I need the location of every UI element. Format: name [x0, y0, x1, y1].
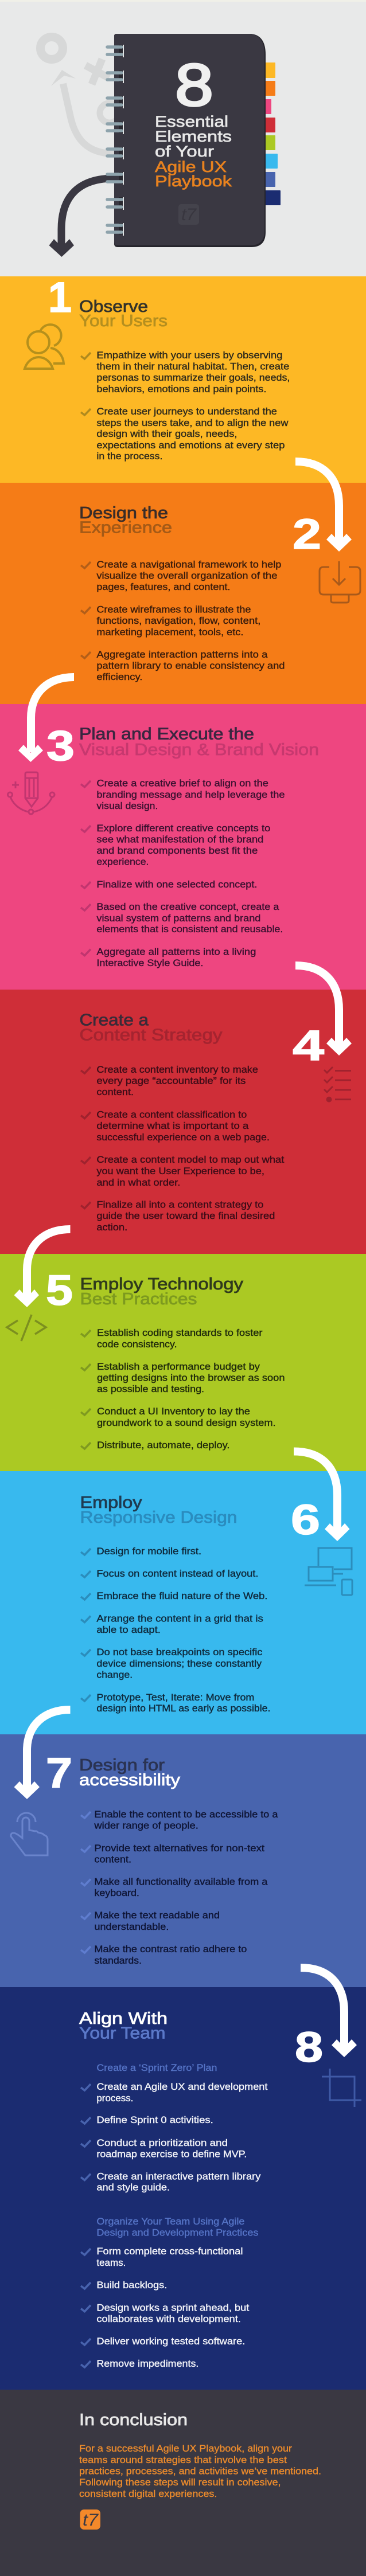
checklist: sprint zero: Conduct a prioritization and: [96, 2138, 228, 2148]
icon: code brackets: [7, 1315, 46, 1341]
icon: checklist: [324, 1067, 351, 1101]
heading: [79, 504, 172, 537]
heading: Observe: [79, 298, 148, 316]
number 5: 5: [46, 1266, 73, 1314]
icon: t7 logo: [80, 2509, 100, 2530]
checklist: Based on the creative concept, create a: [96, 902, 279, 912]
checklist: Establish coding standards to foster: [97, 1328, 263, 1338]
checklist: sprint zero: process.: [96, 2093, 133, 2104]
checklist: Aggregate interaction patterns into a: [96, 650, 268, 660]
checklist: Create a content model to map out what: [96, 1155, 285, 1165]
title: [155, 52, 232, 190]
checklist: Do not base breakpoints on specific: [96, 1647, 262, 1658]
checklist: functions, navigation, flow, content,: [96, 616, 260, 626]
checklist: Aggregate all patterns into a living: [96, 947, 256, 957]
checklist: pages, features, and content.: [96, 582, 230, 592]
panel: step 7 accessibility: [0, 1734, 366, 1987]
checklist: [81, 1546, 270, 1714]
subheading: sprint zero: Create a ‘Sprint Zero’ Plan: [96, 2063, 217, 2073]
checklist: organize team: Design works a sprint ahead, but: [96, 2303, 250, 2313]
checklist: Create a content inventory to make: [96, 1065, 258, 1075]
heading: Responsive Design: [80, 1508, 237, 1527]
icon: pencil with curve: [8, 772, 54, 814]
number 6: 6: [291, 1496, 320, 1543]
title: of Your: [155, 143, 214, 160]
subheading: organize team: Design and Development Practices: [96, 2228, 258, 2238]
title: Playbook: [155, 173, 232, 190]
checklist: experience.: [96, 857, 149, 867]
checklist: organize team: collaborates with development.: [96, 2314, 241, 2324]
checklist: elements that is consistent and reusable.: [96, 924, 283, 935]
heading: Your Users: [79, 312, 168, 330]
title: Essential: [155, 113, 228, 130]
checklist: [81, 1809, 278, 1966]
arrow: step 7 to 8: [301, 1968, 357, 2057]
checklist: [81, 1328, 285, 1451]
checklist: sprint zero: Create an interactive pattern library: [96, 2172, 261, 2182]
heading: Plan and Execute the: [79, 725, 254, 744]
panel: conclusion: [0, 2390, 366, 2576]
heading: [79, 2010, 168, 2043]
arrow: step 4 to 5: [14, 1229, 70, 1307]
number 2: 2: [293, 510, 321, 558]
arrow: step 1 to 2: [295, 462, 352, 552]
checklist: Create user journeys to understand the: [96, 406, 277, 417]
panel: step 2 design the experience: [0, 483, 366, 704]
checklist: behaviors, emotions and pain points.: [96, 384, 266, 394]
checklist: Enable the content to be accessible to a: [94, 1809, 278, 1820]
checklist: steps the users take, and to align the new: [96, 418, 288, 428]
checklist: understandable.: [94, 1922, 169, 1932]
checklist: content.: [94, 1855, 131, 1865]
title: 8: [175, 52, 213, 119]
checklist: sprint zero: and style guide.: [96, 2183, 170, 2193]
heading: [79, 1756, 181, 1789]
checklist: Explore different creative concepts to: [96, 823, 270, 834]
checklist: sprint zero: roadmap exercise to define MVP.: [96, 2149, 247, 2160]
heading: accessibility: [79, 1771, 181, 1789]
number 1: 1: [48, 273, 72, 321]
panel: step 5 technology: [0, 1254, 366, 1471]
checklist: Prototype, Test, Iterate: Move from: [96, 1692, 254, 1703]
notebook cover: [114, 34, 266, 247]
checklist: design with their goals, needs,: [96, 429, 237, 439]
checklist: wider range of people.: [94, 1821, 198, 1831]
heading: Content Strategy: [79, 1026, 223, 1045]
checklist: pattern library to enable consistency and: [96, 661, 285, 671]
subheading: organize team: Organize Your Team Using Agile: [96, 2217, 244, 2227]
checklist: successful experience on a web page.: [96, 1132, 270, 1143]
checklist: in the process.: [96, 451, 162, 462]
arrow: step 5 to 6: [294, 1452, 350, 1541]
number 4: 4: [293, 1022, 324, 1069]
icon: t7 logo: t7: [83, 2511, 99, 2530]
heading: [79, 725, 319, 759]
checklist: action.: [96, 1222, 127, 1233]
checklist: and brand components best fit the: [96, 846, 258, 856]
arrow: step 2 to 3: [18, 677, 74, 762]
icon: monitor download: [320, 561, 360, 603]
checklist: as possible and testing.: [97, 1384, 204, 1394]
checklist: visual design.: [96, 801, 158, 811]
checklist: content.: [96, 1087, 134, 1097]
checklist: [81, 560, 285, 682]
heading: [79, 298, 168, 330]
checklist: organize team: Remove impediments.: [96, 2359, 198, 2369]
checklist: visual system of patterns and brand: [96, 913, 260, 924]
icon: touch hand: [11, 1813, 48, 1855]
checklist: organize team: [81, 2246, 250, 2369]
checklist: Create a creative brief to align on the: [96, 779, 268, 789]
heading: [79, 1011, 223, 1045]
checklist: Focus on content instead of layout.: [96, 1569, 258, 1579]
conclusion text: teams around strategies that involve the best: [79, 2455, 287, 2465]
checklist: you want the User Experience to be,: [96, 1166, 264, 1176]
checklist: groundwork to a sound design system.: [97, 1418, 276, 1428]
checklist: organize team: Form complete cross-functional: [96, 2246, 243, 2257]
checklist: Embrace the fluid nature of the Web.: [96, 1591, 267, 1601]
checklist: Finalize with one selected concept.: [96, 879, 257, 890]
conclusion text: [79, 2444, 321, 2499]
heading: [80, 1494, 237, 1527]
heading: [80, 1275, 244, 1308]
icon: logo on cover: [178, 204, 199, 225]
checklist: device dimensions; these constantly: [96, 1659, 262, 1669]
checklist: see what manifestation of the brand: [96, 835, 263, 845]
checklist: organize team: Build backlogs.: [96, 2280, 167, 2290]
checklist: able to adapt.: [96, 1625, 161, 1635]
checklist: [81, 350, 290, 462]
checklist: Arrange the content in a grid that is: [96, 1613, 263, 1624]
checklist: [81, 1065, 285, 1233]
checklist: getting designs into the browser as soon: [97, 1373, 285, 1383]
checklist: Distribute, automate, deploy.: [97, 1440, 229, 1451]
heading: Visual Design & Brand Vision: [79, 741, 319, 759]
heading: In conclusion: [79, 2411, 188, 2429]
checklist: marketing placement, tools, etc.: [96, 627, 243, 638]
checklist: design into HTML as early as possible.: [96, 1703, 270, 1714]
checklist: Establish a performance budget by: [97, 1362, 260, 1372]
heading: Create a: [79, 1011, 149, 1030]
checklist: sprint zero: [81, 2082, 268, 2193]
heading: Your Team: [79, 2024, 165, 2043]
title: Agile UX: [155, 158, 227, 175]
heading: Align With: [79, 2010, 168, 2028]
panel: step 3 visual design: [0, 704, 366, 990]
number 8: 8: [295, 2023, 323, 2071]
checklist: Empathize with your users by observing: [96, 350, 282, 361]
icon: spiral binding: [107, 45, 124, 236]
icon: faded play diagram: [40, 37, 119, 154]
subheading: organize team: [96, 2217, 258, 2238]
checklist: standards.: [94, 1956, 142, 1966]
panel: step 4 content strategy: [0, 990, 366, 1254]
checklist: Make all functionality available from a: [94, 1877, 268, 1887]
checklist: sprint zero: Define Sprint 0 activities.: [96, 2115, 213, 2125]
panel: step 6 responsive design: [0, 1471, 366, 1734]
checklist: [81, 779, 285, 968]
conclusion text: consistent digital experiences.: [79, 2489, 217, 2499]
checklist: change.: [96, 1670, 133, 1680]
arrow: step 3 to 4: [295, 965, 352, 1056]
icon: dark arrow from notebook: [49, 178, 114, 257]
icon: users: [25, 325, 64, 369]
icon: crop: [322, 2069, 361, 2107]
conclusion text: practices, processes, and activities we’ve mentioned.: [79, 2466, 321, 2476]
checklist: organize team: Deliver working tested software.: [96, 2336, 245, 2347]
checklist: sprint zero: Create an Agile UX and development: [96, 2082, 268, 2092]
heading: Design the: [79, 504, 168, 522]
checklist: efficiency.: [96, 672, 142, 682]
panel: cover: [0, 0, 366, 276]
checklist: Make the contrast ratio adhere to: [94, 1944, 247, 1955]
heading: Best Practices: [80, 1290, 197, 1308]
checklist: Finalize all into a content strategy to: [96, 1199, 263, 1210]
checklist: every page “accountable” for its: [96, 1076, 246, 1086]
checklist: organize team: teams.: [96, 2258, 126, 2268]
icon: coloured tabs: [264, 62, 281, 205]
checklist: Conduct a UI Inventory to lay the: [97, 1406, 250, 1417]
title: Elements: [155, 128, 232, 145]
checklist: Make the text readable and: [94, 1910, 220, 1921]
checklist: guide the user toward the final desired: [96, 1211, 275, 1221]
heading: Design for: [79, 1756, 165, 1774]
heading: Employ Technology: [80, 1275, 244, 1293]
conclusion text: Following these steps will result in cohesive,: [79, 2477, 281, 2488]
checklist: determine what is important to a: [96, 1121, 249, 1131]
checklist: code consistency.: [97, 1339, 177, 1350]
checklist: keyboard.: [94, 1888, 139, 1898]
icon: responsive devices: [305, 1548, 352, 1595]
number 7: 7: [46, 1749, 72, 1797]
checklist: and in what order.: [96, 1178, 180, 1188]
heading: Experience: [79, 518, 172, 537]
icon: logo on cover: t7: [181, 205, 197, 224]
arrow: step 6 to 7: [14, 1710, 70, 1799]
checklist: Provide text alternatives for non-text: [94, 1843, 264, 1854]
number 3: 3: [46, 722, 75, 769]
checklist: Create wireframes to illustrate the: [96, 605, 251, 615]
panel: step 1 observe: [0, 273, 366, 483]
checklist: branding message and help leverage the: [96, 790, 285, 800]
checklist: visualize the overall organization of the: [96, 571, 277, 581]
heading: Employ: [80, 1494, 142, 1512]
checklist: Create a navigational framework to help: [96, 560, 281, 570]
checklist: personas to summarize their goals, needs,: [96, 373, 290, 383]
checklist: expectations and emotions at every step: [96, 440, 285, 451]
panel: step 8 align with your team: [0, 1987, 366, 2390]
checklist: Interactive Style Guide.: [96, 958, 203, 968]
checklist: Design for mobile first.: [96, 1546, 201, 1557]
conclusion text: For a successful Agile UX Playbook, align your: [79, 2444, 293, 2454]
checklist: Create a content classification to: [96, 1110, 247, 1120]
checklist: them in their natural habitat. Then, create: [96, 361, 289, 372]
